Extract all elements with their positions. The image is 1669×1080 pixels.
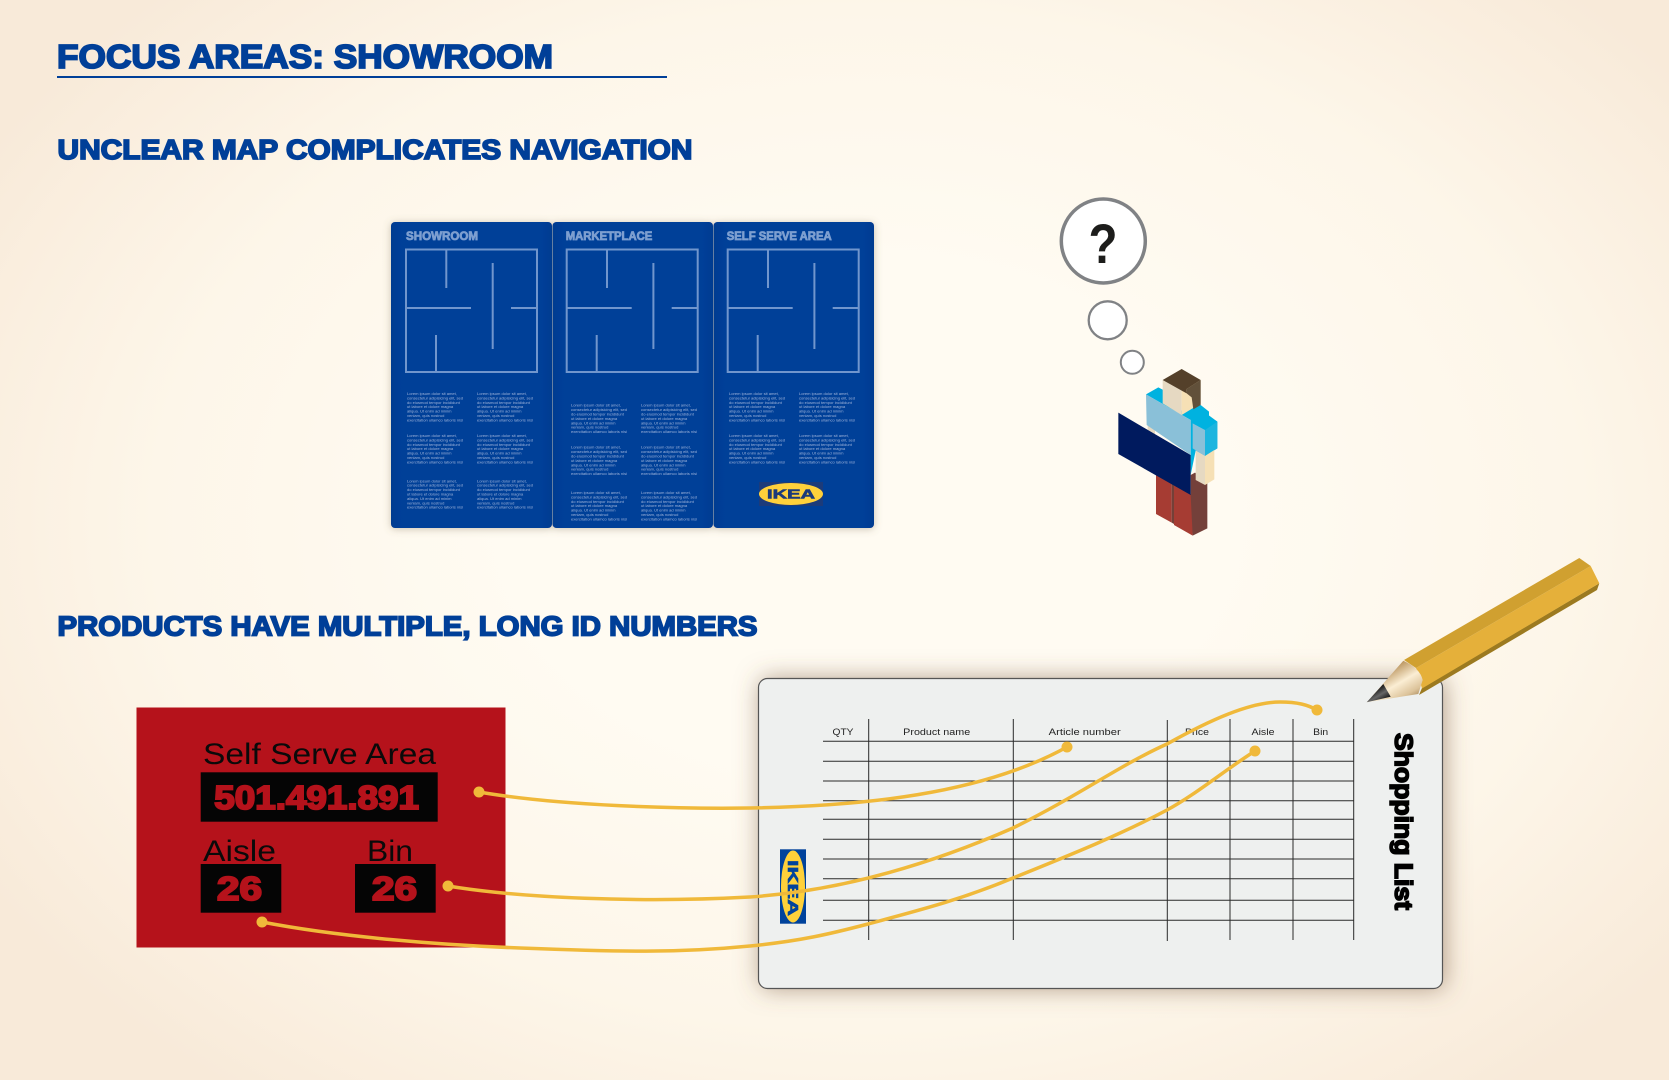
panel: marketplace: exercitation ullamco laboris nisi (641, 471, 697, 476)
table: Article number (1049, 727, 1122, 738)
panel: showroom: aliqua. Ut enim ad minim (407, 409, 452, 414)
panel: showroom: consectetur adipisicing elit, sed (407, 437, 463, 442)
table: QTY (832, 727, 854, 738)
panel: marketplace: veniam, quis nostrud (571, 467, 608, 472)
panel: showroom: exercitation ullamco laboris nisi (477, 417, 533, 422)
article number: 501.491.891 (214, 780, 419, 817)
panel: marketplace: consectetur adipisicing elit, sed (571, 449, 627, 454)
panel: showroom: Lorem ipsum dolor sit amet, (477, 433, 527, 438)
icon: ikea logo (759, 482, 823, 506)
panel: showroom: Lorem ipsum dolor sit amet, (407, 391, 457, 396)
heading: product ids: PRODUCTS HAVE MULTIPLE, LONG ID NUMBERS (58, 610, 757, 642)
panel: showroom: ut labore et dolore magna (407, 404, 454, 409)
panel: marketplace: Lorem ipsum dolor sit amet, (641, 445, 691, 450)
article number (201, 772, 438, 822)
panel: marketplace: consectetur adipisicing elit, sed (641, 494, 697, 499)
panel: showroom: exercitation ullamco laboris nisi (477, 459, 533, 464)
panel: marketplace: aliqua. Ut enim ad minim (571, 420, 616, 425)
label: self serve area: Self Serve Area (203, 738, 436, 771)
panel: self serve area: ut labore et dolore magna (729, 404, 776, 409)
connector: aisle (256, 746, 1260, 951)
panel: showroom: ut labore et dolore magna (477, 492, 524, 496)
table: Aisle (1252, 727, 1274, 738)
panel: showroom: ut labore et dolore magna (477, 404, 524, 409)
panel: marketplace: consectetur adipisicing elit, sed (571, 407, 627, 412)
connector: bin (442, 702, 1322, 900)
panel: marketplace: MARKETPLACE (566, 229, 652, 243)
panel: showroom: consectetur adipisicing elit, sed (477, 483, 533, 488)
panel: marketplace: do eiusmod tempor incididunt (641, 412, 695, 416)
table (823, 719, 1354, 941)
panel: self serve area: ut labore et dolore magna (799, 404, 846, 409)
store map brochure (391, 222, 874, 528)
panel: marketplace: Lorem ipsum dolor sit amet, (571, 490, 621, 495)
panel: showroom: SHOWROOM (406, 229, 478, 243)
panel: self serve area: aliqua. Ut enim ad minim (799, 409, 844, 414)
panel: marketplace: veniam, quis nostrud (641, 467, 678, 472)
title: FOCUS AREAS: SHOWROOM (57, 38, 553, 75)
icon: ikea logo: IKEA (767, 486, 816, 502)
panel: showroom: aliqua. Ut enim ad minim (407, 496, 452, 501)
panel: self serve area: Lorem ipsum dolor sit amet, (729, 433, 779, 438)
panel: marketplace: veniam, quis nostrud (571, 512, 608, 517)
panel: self serve area: Lorem ipsum dolor sit amet, (729, 391, 779, 396)
panel: marketplace: Lorem ipsum dolor sit amet, (571, 445, 621, 450)
panel: self serve area: consectetur adipisicing elit, sed (729, 437, 785, 442)
shopping list label: Shopping List (1389, 733, 1417, 911)
panel: showroom: aliqua. Ut enim ad minim (477, 496, 522, 501)
panel: showroom: Lorem ipsum dolor sit amet, (477, 478, 527, 483)
panel: self serve area: exercitation ullamco laboris nisi (729, 459, 785, 464)
panel: marketplace: aliqua. Ut enim ad minim (571, 462, 616, 467)
panel: showroom: do eiusmod tempor incididunt (477, 442, 531, 447)
panel: showroom: Lorem ipsum dolor sit amet, (407, 433, 457, 438)
panel: self serve area: veniam, quis nostrud (799, 455, 836, 460)
panel: self serve area: Lorem ipsum dolor sit amet, (799, 391, 849, 396)
panel: marketplace: aliqua. Ut enim ad minim (641, 462, 686, 467)
panel: self serve area: consectetur adipisicing elit, sed (799, 437, 855, 442)
panel: showroom: aliqua. Ut enim ad minim (477, 451, 522, 456)
panel: marketplace: do eiusmod tempor incididunt (571, 454, 625, 458)
panel: showroom: veniam, quis nostrud (407, 413, 444, 418)
aisle (201, 835, 281, 913)
panel: showroom: ut labore et dolore magna (477, 446, 524, 451)
panel: marketplace: exercitation ullamco laboris nisi (641, 429, 697, 434)
icon: ikea logo vertical (780, 849, 806, 924)
panel: marketplace: consectetur adipisicing elit, sed (571, 494, 627, 499)
panel: self serve area: aliqua. Ut enim ad minim (729, 409, 774, 414)
panel: self serve area: ut labore et dolore magna (729, 446, 776, 451)
panel: showroom: veniam, quis nostrud (407, 455, 444, 460)
panel: marketplace: ut labore et dolore magna (641, 503, 688, 508)
panel: marketplace: aliqua. Ut enim ad minim (641, 420, 686, 425)
aisle: 26 (217, 870, 262, 907)
panel: marketplace (552, 222, 713, 528)
bin: Bin (367, 835, 413, 868)
panel: showroom: veniam, quis nostrud (407, 500, 444, 505)
panel: self serve area: do eiusmod tempor incididunt (799, 442, 853, 447)
panel: showroom: Lorem ipsum dolor sit amet, (407, 478, 457, 483)
heading: unclear map: UNCLEAR MAP COMPLICATES NAVIGATION (58, 134, 692, 165)
panel: self serve area: SELF SERVE AREA (727, 229, 832, 243)
panel: self serve area: veniam, quis nostrud (799, 413, 836, 418)
panel: showroom (391, 222, 552, 528)
panel: showroom: exercitation ullamco laboris nisi (407, 505, 463, 510)
panel: marketplace: Lorem ipsum dolor sit amet, (641, 403, 691, 408)
panel: marketplace: veniam, quis nostrud (571, 425, 608, 430)
panel: marketplace: do eiusmod tempor incididunt (571, 499, 625, 504)
panel: self serve area: do eiusmod tempor incididunt (729, 442, 783, 447)
bin: 26 (372, 870, 417, 907)
panel: marketplace: exercitation ullamco laboris nisi (571, 516, 627, 521)
panel: self serve area: veniam, quis nostrud (729, 413, 766, 418)
panel: self serve area: ut labore et dolore magna (799, 446, 846, 451)
panel: self serve area: Lorem ipsum dolor sit amet, (799, 433, 849, 438)
panel: marketplace: do eiusmod tempor incididunt (641, 499, 695, 504)
panel: showroom: do eiusmod tempor incididunt (407, 442, 461, 447)
panel: self serve area: do eiusmod tempor incididunt (729, 400, 783, 405)
panel: showroom: aliqua. Ut enim ad minim (477, 409, 522, 414)
icon: person holding map (1118, 369, 1217, 536)
panel: self serve area: exercitation ullamco laboris nisi (799, 459, 855, 464)
panel: marketplace: veniam, quis nostrud (641, 425, 678, 430)
panel: marketplace: exercitation ullamco laboris nisi (641, 516, 697, 521)
panel: self serve area: exercitation ullamco laboris nisi (729, 417, 785, 422)
table: Product name (903, 727, 970, 738)
panel: marketplace: aliqua. Ut enim ad minim (571, 508, 616, 513)
panel: showroom: do eiusmod tempor incididunt (407, 487, 461, 492)
shopping list card (758, 678, 1442, 988)
panel: marketplace: consectetur adipisicing elit, sed (641, 407, 697, 412)
panel: showroom: consectetur adipisicing elit, sed (477, 437, 533, 442)
panel: marketplace: ut labore et dolore magna (641, 458, 688, 463)
panel: self serve area: do eiusmod tempor incididunt (799, 400, 853, 405)
panel: marketplace: ut labore et dolore magna (571, 458, 618, 463)
panel: marketplace: ut labore et dolore magna (641, 416, 688, 421)
panel: self serve area: consectetur adipisicing elit, sed (729, 395, 785, 400)
panel: marketplace: ut labore et dolore magna (571, 416, 618, 421)
panel: showroom: do eiusmod tempor incididunt (477, 400, 531, 405)
panel: showroom: aliqua. Ut enim ad minim (407, 451, 452, 456)
panel: showroom: veniam, quis nostrud (477, 413, 514, 418)
panel: self serve area (714, 222, 874, 528)
panel: showroom: Lorem ipsum dolor sit amet, (477, 391, 527, 396)
panel: showroom: veniam, quis nostrud (477, 455, 514, 460)
table: Bin (1313, 727, 1328, 738)
panel: marketplace: do eiusmod tempor incididunt (571, 412, 625, 416)
panel: showroom: do eiusmod tempor incididunt (477, 487, 531, 492)
panel: self serve area: consectetur adipisicing elit, sed (799, 395, 855, 400)
panel: showroom: consectetur adipisicing elit, sed (477, 395, 533, 400)
panel: self serve area: aliqua. Ut enim ad minim (729, 451, 774, 456)
panel: showroom: ut labore et dolore magna (407, 492, 454, 496)
connector: article number (474, 742, 1072, 808)
panel: showroom: exercitation ullamco laboris nisi (407, 417, 463, 422)
thought bubbles: ? (1088, 212, 1118, 275)
icon: ikea logo vertical: IKEA (784, 860, 801, 916)
panel: marketplace: Lorem ipsum dolor sit amet, (641, 490, 691, 495)
icon: pencil (1367, 558, 1599, 702)
panel: showroom: ut labore et dolore magna (407, 446, 454, 451)
panel: showroom: exercitation ullamco laboris nisi (407, 459, 463, 464)
panel: marketplace: aliqua. Ut enim ad minim (641, 508, 686, 513)
thought bubbles (1061, 199, 1145, 374)
panel: marketplace: exercitation ullamco laboris nisi (571, 471, 627, 476)
bin (355, 835, 436, 913)
panel: marketplace: veniam, quis nostrud (641, 512, 678, 517)
panel: marketplace: ut labore et dolore magna (571, 503, 618, 508)
panel: self serve area: veniam, quis nostrud (729, 455, 766, 460)
table: Price (1185, 727, 1209, 738)
panel: self serve area: aliqua. Ut enim ad minim (799, 451, 844, 456)
panel: marketplace: Lorem ipsum dolor sit amet, (571, 403, 621, 408)
red product tag (136, 708, 506, 948)
panel: self serve area: exercitation ullamco laboris nisi (799, 417, 855, 422)
panel: showroom: do eiusmod tempor incididunt (407, 400, 461, 405)
panel: showroom: veniam, quis nostrud (477, 500, 514, 505)
aisle: Aisle (203, 835, 276, 868)
panel: showroom: consectetur adipisicing elit, sed (407, 483, 463, 488)
panel: marketplace: consectetur adipisicing elit, sed (641, 449, 697, 454)
panel: marketplace: exercitation ullamco laboris nisi (571, 429, 627, 434)
panel: showroom: consectetur adipisicing elit, sed (407, 395, 463, 400)
panel: showroom: exercitation ullamco laboris nisi (477, 505, 533, 510)
panel: marketplace: do eiusmod tempor incididunt (641, 454, 695, 458)
